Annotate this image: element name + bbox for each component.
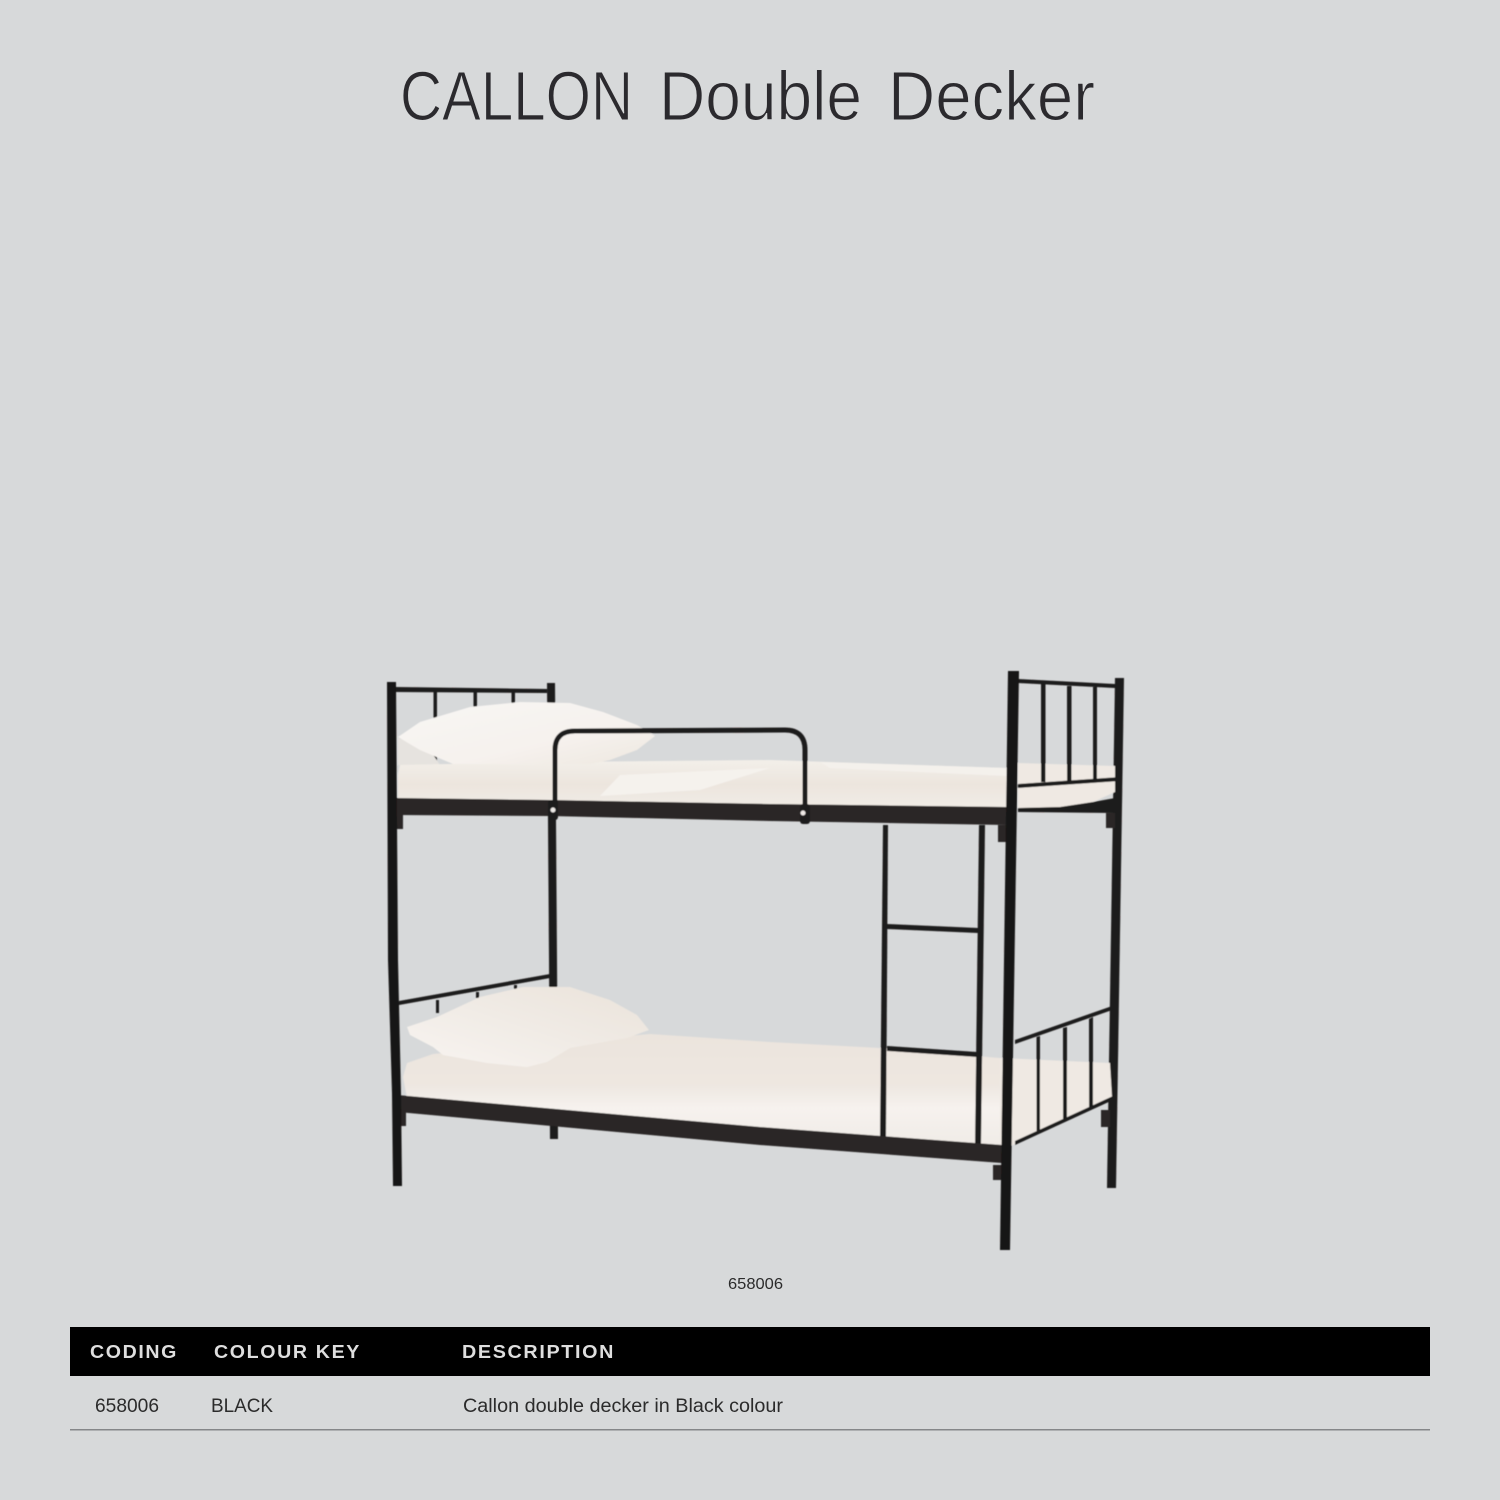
header: colour key: COLOUR KEY [214,1342,361,1362]
lower side rail [397,1095,1002,1163]
title: Double [659,57,862,135]
brackets [393,813,1115,1180]
near posts [387,671,1019,1250]
title: Decker [888,57,1095,135]
upper side rail [394,798,1007,825]
row: code: 658006 [95,1396,159,1417]
table header bar [70,1327,1430,1376]
header: coding: CODING [90,1342,178,1362]
upper pillow [398,702,655,764]
foot end rails and slats [1015,679,1120,1145]
far posts and head rail behind the bedding [396,678,1124,1188]
table [70,1327,1430,1430]
lower mattress [403,1034,1112,1148]
row: description: Callon double decker in Black colour [463,1396,784,1417]
title [400,57,1095,135]
product code caption: 658006 [728,1276,783,1293]
lower pillow [407,987,649,1067]
title: CALLON [400,57,633,135]
bunk bed illustration [387,671,1124,1250]
header: description: DESCRIPTION [462,1342,615,1362]
row: colour: BLACK [211,1396,273,1417]
ladder [880,825,985,1145]
guard rail [548,730,810,824]
upper mattress [398,738,1115,809]
